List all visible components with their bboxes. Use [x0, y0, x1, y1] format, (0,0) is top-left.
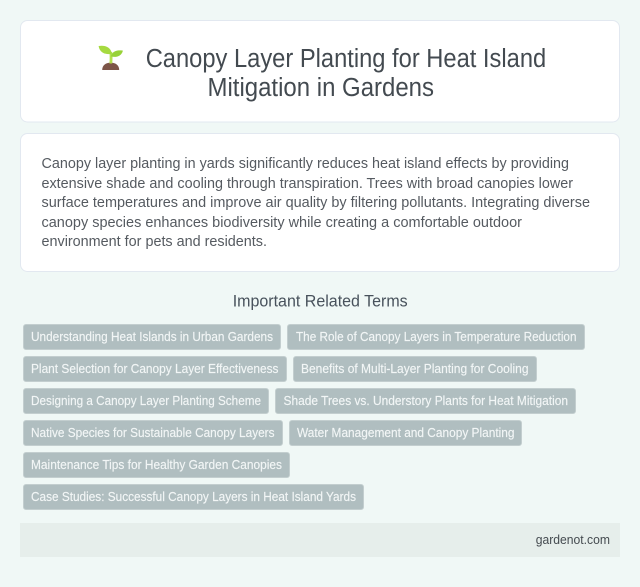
tag: Native Species for Sustainable Canopy Layers [31, 425, 274, 440]
tag [24, 388, 268, 414]
icon: seedling [99, 46, 123, 70]
tag: Maintenance Tips for Healthy Garden Canopies [31, 457, 282, 472]
tag list [24, 324, 584, 510]
panel: title card [20, 20, 620, 122]
text block: description: Canopy layer planting in yards significantly reduces heat island effects by providing [42, 155, 569, 172]
text block: description: environment for pets and residents. [42, 233, 267, 250]
title [146, 45, 546, 102]
tag [24, 356, 286, 382]
tag: Benefits of Multi-Layer Planting for Cooling [301, 361, 528, 376]
tag [24, 420, 282, 446]
tag [288, 324, 584, 350]
text block: description: canopy species enhances biodiversity while creating a comfortable outdoor [42, 214, 522, 231]
text block: description: extensive shade and cooling through transpiration. Trees with broad canopies lower [42, 175, 573, 192]
tag: Case Studies: Successful Canopy Layers in Heat Island Yards [31, 489, 356, 504]
text block: description [42, 155, 590, 250]
heading: related terms: Important Related Terms [233, 292, 408, 310]
tag: Plant Selection for Canopy Layer Effectiveness [31, 361, 278, 376]
footer [20, 523, 620, 557]
title: Mitigation in Gardens [208, 74, 434, 102]
tag [24, 324, 280, 350]
panel: description card [20, 134, 620, 272]
tag [290, 420, 522, 446]
tag: The Role of Canopy Layers in Temperature Reduction [296, 329, 576, 344]
tag [276, 388, 576, 414]
tag [24, 484, 364, 510]
tag: Water Management and Canopy Planting [297, 425, 514, 440]
tag: Shade Trees vs. Understory Plants for Heat Mitigation [284, 393, 568, 408]
title: Canopy Layer Planting for Heat Island [146, 45, 546, 73]
tag: Understanding Heat Islands in Urban Gardens [31, 329, 273, 344]
tag [294, 356, 536, 382]
tag [24, 452, 290, 478]
footer source text: gardenot.com [536, 533, 610, 547]
tag: Designing a Canopy Layer Planting Scheme [31, 393, 261, 408]
text block: description: surface temperatures and improve air quality by filtering pollutants. Integrating diverse [42, 194, 590, 211]
